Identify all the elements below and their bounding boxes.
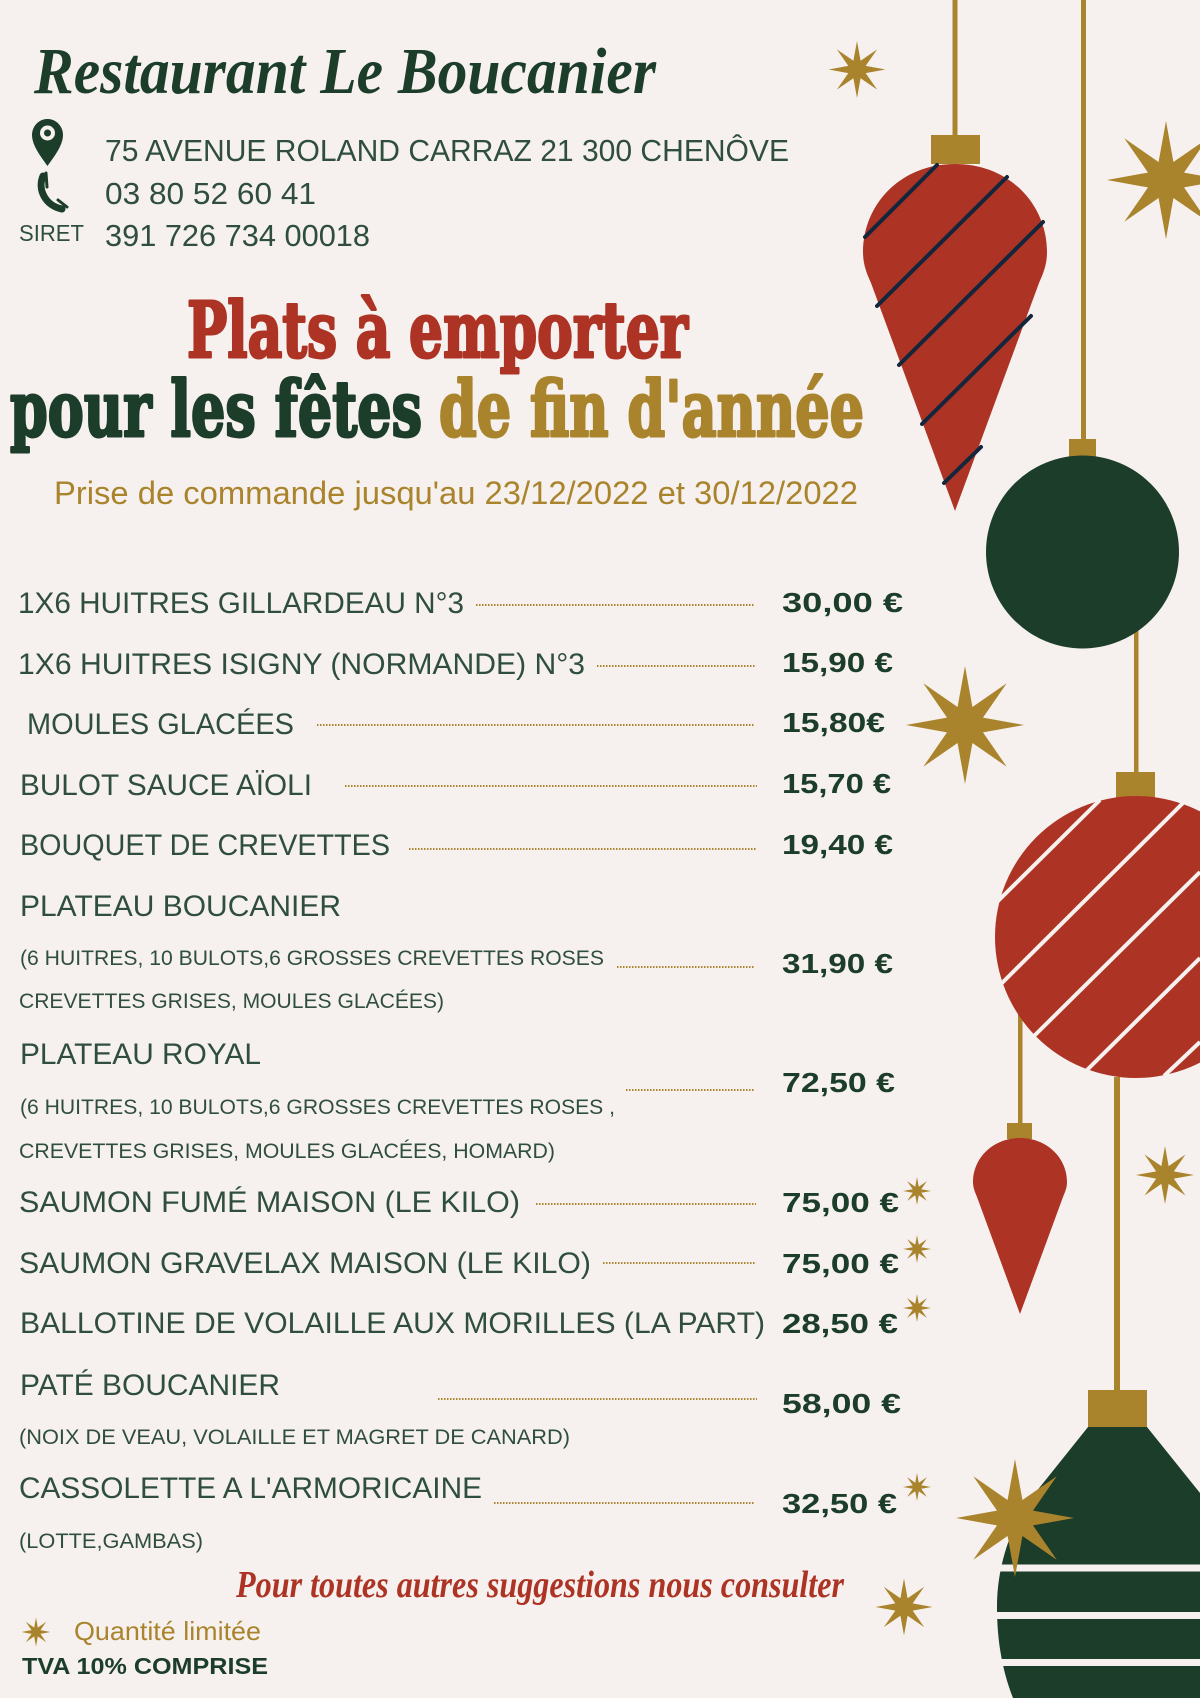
icon: legend star <box>22 1618 50 1646</box>
item: pate boucanier <box>19 1369 902 1449</box>
star: overlapping green bauble <box>956 1459 1074 1577</box>
item: huitres gillardeau: 1X6 HUITRES GILLARDEAU N°3 <box>18 587 464 620</box>
item: ballotine: BALLOTINE DE VOLAILLE AUX MORILLES (LA PART) <box>20 1307 765 1340</box>
item: saumon gravelax: 75,00 € <box>782 1248 900 1279</box>
item: ballotine: 28,50 € <box>782 1308 899 1339</box>
item: moules glacees: MOULES GLACÉES <box>27 708 294 741</box>
item: cassolette <box>19 1472 931 1553</box>
item: saumon fume <box>19 1177 931 1219</box>
heading line 1: Plats à emporter <box>187 286 689 376</box>
item: huitres isigny: 1X6 HUITRES ISIGNY (NORMANDE) N°3 <box>18 648 585 681</box>
legend text: Quantité limitée <box>74 1616 261 1646</box>
item: bulot: BULOT SAUCE AÏOLI <box>20 769 312 802</box>
item: plateau royal: CREVETTES GRISES, MOULES GLACÉES, HOMARD) <box>19 1140 555 1163</box>
ornament: red striped bauble <box>995 625 1200 1078</box>
item: ballotine <box>20 1294 931 1340</box>
star: right upper <box>1107 121 1200 239</box>
item: plateau royal: (6 HUITRES, 10 BULOTS,6 GROSSES CREVETTES ROSES , <box>20 1096 615 1119</box>
suggestion note: Pour toutes autres suggestions nous consulter <box>235 1564 845 1606</box>
item: plateau royal: 72,50 € <box>782 1067 896 1098</box>
item: pate boucanier: PATÉ BOUCANIER <box>20 1369 280 1402</box>
item: cassolette: (LOTTE,GAMBAS) <box>19 1530 203 1553</box>
phone number: 03 80 52 60 41 <box>105 176 316 211</box>
ornament: red striped drop <box>863 0 1047 511</box>
siret label: SIRET <box>19 220 84 246</box>
icon: phone <box>41 173 67 209</box>
item: plateau boucanier: CREVETTES GRISES, MOULES GLACÉES) <box>19 990 444 1013</box>
heading <box>10 286 864 455</box>
heading line 2 gold: de fin d'année <box>439 365 864 455</box>
ornament: plain green bauble <box>986 0 1179 648</box>
ornament: green striped bauble <box>990 1077 1200 1698</box>
item: plateau boucanier: PLATEAU BOUCANIER <box>20 890 341 923</box>
item: plateau royal: PLATEAU ROYAL <box>20 1038 261 1071</box>
item: huitres gillardeau: 30,00 € <box>782 587 904 618</box>
item: bouquet de crevettes: BOUQUET DE CREVETTES <box>20 829 390 862</box>
siret number: 391 726 734 00018 <box>105 218 370 253</box>
item: pate boucanier: (NOIX DE VEAU, VOLAILLE ET MAGRET DE CANARD) <box>19 1426 570 1449</box>
item: saumon fume: 75,00 € <box>782 1187 900 1218</box>
star: right lower <box>1136 1146 1194 1204</box>
star: middle <box>906 666 1024 784</box>
item: plateau boucanier: (6 HUITRES, 10 BULOTS,6 GROSSES CREVETTES ROSES <box>20 947 604 970</box>
star: bottom <box>876 1578 932 1636</box>
item: huitres isigny: 15,90 € <box>782 647 894 678</box>
heading line 2 green: pour les fêtes <box>10 365 422 455</box>
item: plateau boucanier: 31,90 € <box>782 948 894 979</box>
item: huitres gillardeau <box>18 587 904 620</box>
address: 75 AVENUE ROLAND CARRAZ 21 300 CHENÔVE <box>105 133 789 168</box>
item: plateau boucanier <box>19 890 894 1013</box>
ornament: small red drop <box>973 1010 1067 1314</box>
item: saumon fume: SAUMON FUMÉ MAISON (LE KILO) <box>19 1186 520 1219</box>
icon: location pin <box>32 119 63 166</box>
menu list <box>18 587 931 1553</box>
item: bouquet de crevettes <box>20 829 894 862</box>
star: top <box>828 41 886 98</box>
vat note: TVA 10% COMPRISE <box>22 1653 268 1679</box>
legend: limited quantity <box>22 1616 261 1646</box>
title: Restaurant Le Boucanier <box>33 35 657 108</box>
contact block <box>19 119 789 253</box>
order deadline: Prise de commande jusqu'au 23/12/2022 et 30/12/2022 <box>54 475 858 511</box>
item: huitres isigny <box>18 647 894 681</box>
item: moules glacees <box>27 707 886 741</box>
item: cassolette: 32,50 € <box>782 1488 898 1519</box>
item: moules glacees: 15,80€ <box>782 707 886 738</box>
item: cassolette: CASSOLETTE A L'ARMORICAINE <box>19 1472 482 1505</box>
item: saumon gravelax <box>19 1235 931 1280</box>
item: bulot <box>20 768 891 802</box>
item: plateau royal <box>19 1038 896 1163</box>
item: bouquet de crevettes: 19,40 € <box>782 829 894 860</box>
item: bulot: 15,70 € <box>782 768 891 799</box>
item: saumon gravelax: SAUMON GRAVELAX MAISON (LE KILO) <box>19 1247 591 1280</box>
item: pate boucanier: 58,00 € <box>782 1388 902 1419</box>
